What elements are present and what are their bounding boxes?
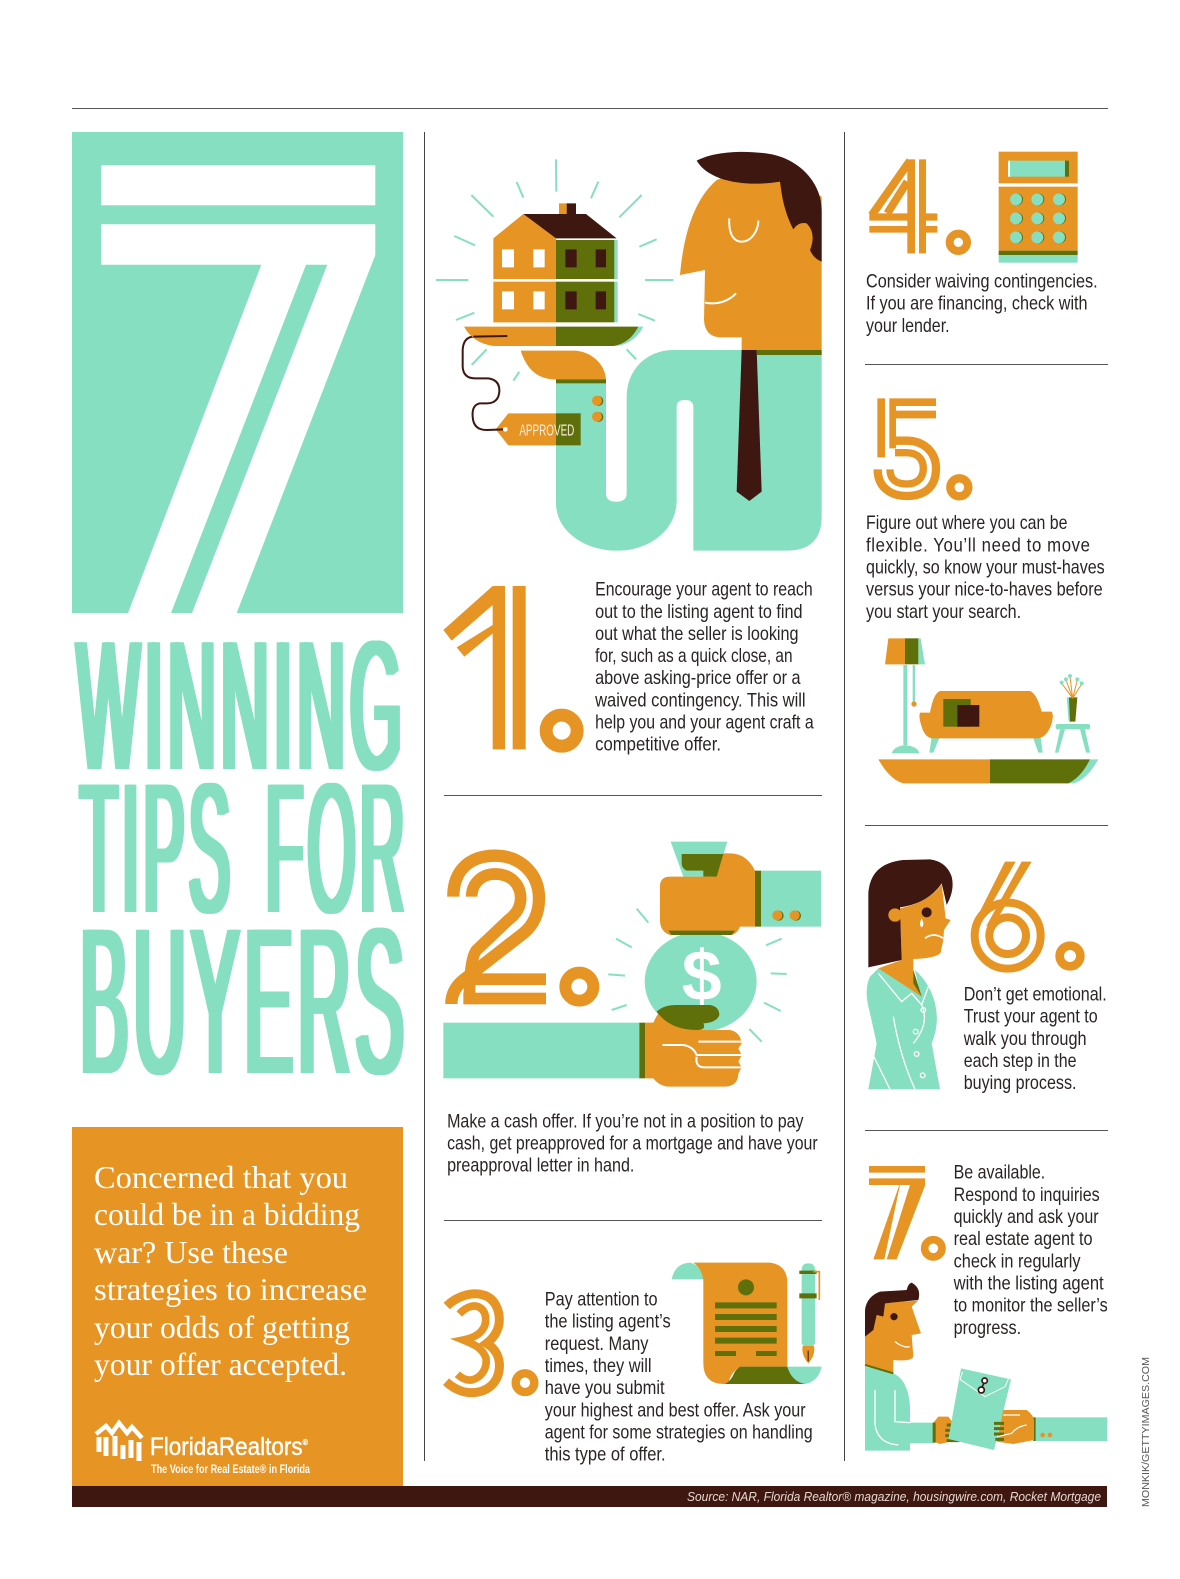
tie	[737, 350, 762, 501]
sofa	[919, 691, 1053, 753]
title: BUYERS	[80, 886, 409, 1118]
tip 1 text: out to the listing agent to find	[595, 602, 803, 623]
title	[74, 602, 409, 1118]
illustration: numeral 7 and man with envelope	[865, 1166, 1107, 1451]
tip 3 text: request. Many	[545, 1334, 649, 1355]
intro text: strategies to increase	[94, 1271, 367, 1307]
approved tag: APPROVED	[519, 422, 574, 439]
rays	[436, 159, 673, 381]
hair	[697, 152, 822, 262]
numeral 1	[443, 586, 577, 749]
photo credit: MONKIK/GETTYIMAGES.COM	[1141, 1357, 1152, 1507]
logo: Florida Realtors	[96, 1423, 310, 1476]
numeral 4 and calculator	[869, 152, 1078, 263]
tip 2 text: cash, get preapproved for a mortgage and have your	[447, 1133, 818, 1154]
woman	[867, 859, 953, 1089]
title: WINNING	[77, 602, 407, 808]
source bar: Source: NAR, Florida Realtor® magazine, housingwire.com, Rocket Mortgage	[687, 1489, 1101, 1504]
right arm	[1033, 1417, 1107, 1441]
tip 5 text: quickly, so know your must-haves	[866, 557, 1105, 578]
tip 7 text: quickly and ask your	[954, 1207, 1099, 1228]
intro text: war? Use these	[94, 1234, 288, 1270]
numeral 2 and money bag illustration	[443, 842, 821, 1087]
tip 6 text: Trust your agent to	[964, 1007, 1098, 1028]
tip 3 text: your highest and best offer. Ask your	[545, 1400, 806, 1421]
tip 7 text	[953, 1163, 1108, 1339]
tip 2 text: Make a cash offer. If you’re not in a position to pay	[447, 1111, 804, 1132]
tip 1 text: above asking-price offer or a	[595, 668, 801, 689]
numeral 6	[972, 862, 1080, 969]
tip 6	[867, 859, 1107, 1094]
tip 6 text: walk you through	[963, 1029, 1087, 1050]
tip 7 text: to monitor the seller’s	[954, 1296, 1108, 1317]
intro text: could be in a bidding	[94, 1196, 360, 1232]
tip 3 text: the listing agent’s	[545, 1312, 671, 1333]
hand	[521, 351, 606, 379]
logo: Florida Realtors: ®	[303, 1438, 308, 1447]
side table and vase	[1055, 674, 1090, 753]
tip 4 text: Consider waiving contingencies.	[866, 271, 1098, 292]
tip 4	[866, 152, 1098, 337]
tip 6 text: each step in the	[964, 1051, 1076, 1072]
left hand	[933, 1417, 961, 1444]
intro text: Concerned that you	[94, 1159, 348, 1195]
tray	[610, 327, 643, 346]
source bar	[72, 1486, 1107, 1507]
tip 5 text	[866, 513, 1105, 623]
tip 2 text	[447, 1111, 818, 1177]
tip 1 text: help you and your agent craft a	[595, 713, 814, 734]
envelope	[948, 1368, 1011, 1450]
tip 6 text: Don’t get emotional.	[964, 984, 1107, 1005]
numeral 3 and scroll illustration	[446, 1263, 822, 1393]
money bag: $	[682, 936, 722, 1016]
house	[493, 203, 618, 322]
pen	[799, 1263, 819, 1363]
intro text: your offer accepted.	[94, 1346, 347, 1382]
tip 7 text: check in regularly	[954, 1251, 1081, 1272]
upper hand and sleeve	[660, 853, 821, 935]
tip 3 text	[545, 1290, 813, 1466]
body	[556, 350, 822, 551]
tip 5 text: Figure out where you can be	[866, 513, 1067, 534]
tip 7 text: real estate agent to	[954, 1229, 1093, 1250]
tip 1 text: Encourage your agent to reach	[595, 580, 813, 601]
tip 5 text: you start your search.	[866, 602, 1021, 623]
man	[865, 1283, 933, 1451]
illustration: living room	[878, 638, 1098, 783]
tip 7 text: Be available.	[954, 1163, 1045, 1184]
panel: intro box	[72, 1127, 403, 1486]
tip 3 text: times, they will	[545, 1356, 652, 1377]
tip 5 text: flexible. You’ll need to move	[866, 535, 1091, 556]
tip 6 text	[963, 984, 1107, 1094]
title: TIPS FOR	[80, 746, 409, 952]
tip 1 text: out what the seller is looking	[595, 624, 799, 645]
tip 3 text: this type of offer.	[545, 1445, 666, 1466]
money bag	[645, 842, 757, 1032]
panel: big seven	[72, 132, 403, 613]
lamp	[885, 638, 925, 753]
intro text: your odds of getting	[94, 1309, 350, 1345]
tip 4 text: If you are financing, check with	[866, 294, 1088, 315]
illustration: waiter with house on tray	[436, 152, 822, 551]
platform	[878, 759, 1098, 783]
illustration: crying woman and numeral 6	[867, 859, 1080, 1089]
tip 4 text	[866, 271, 1098, 337]
numeral 5	[877, 398, 968, 496]
tip 3	[446, 1263, 822, 1466]
scroll	[672, 1263, 822, 1384]
tip 1 text: waived contingency. This will	[594, 690, 806, 711]
right hand	[994, 1410, 1034, 1444]
tip 2	[443, 842, 821, 1177]
numeral 7	[869, 1166, 942, 1259]
tip 6 text: buying process.	[964, 1073, 1076, 1094]
approved tag	[463, 336, 581, 445]
tip 3 text: agent for some strategies on handling	[545, 1422, 813, 1443]
tip 1	[443, 580, 814, 756]
tip 1 text: for, such as a quick close, an	[595, 646, 793, 667]
lower hand and sleeve	[443, 1005, 742, 1087]
head	[680, 163, 822, 350]
tip 4 text: your lender.	[866, 316, 950, 337]
calculator	[999, 152, 1078, 263]
tip 7 text: progress.	[954, 1318, 1021, 1339]
tip 3 text: Pay attention to	[545, 1290, 658, 1311]
tip 1 text	[594, 580, 814, 756]
logo: Florida Realtors: FloridaRealtors	[150, 1433, 320, 1461]
tip 5	[866, 398, 1105, 783]
tip 7	[865, 1163, 1108, 1451]
tip 5 text: versus your nice-to-haves before	[866, 580, 1103, 601]
logo: Florida Realtors: The Voice for Real Estate® in Florida	[151, 1464, 310, 1476]
tip 3 text: have you submit	[545, 1378, 665, 1399]
tip 1 text: competitive offer.	[595, 735, 721, 756]
tip 2 text: preapproval letter in hand.	[447, 1156, 634, 1177]
tip 7 text: with the listing agent	[953, 1273, 1104, 1294]
intro text	[94, 1159, 367, 1382]
tip 7 text: Respond to inquiries	[954, 1185, 1100, 1206]
